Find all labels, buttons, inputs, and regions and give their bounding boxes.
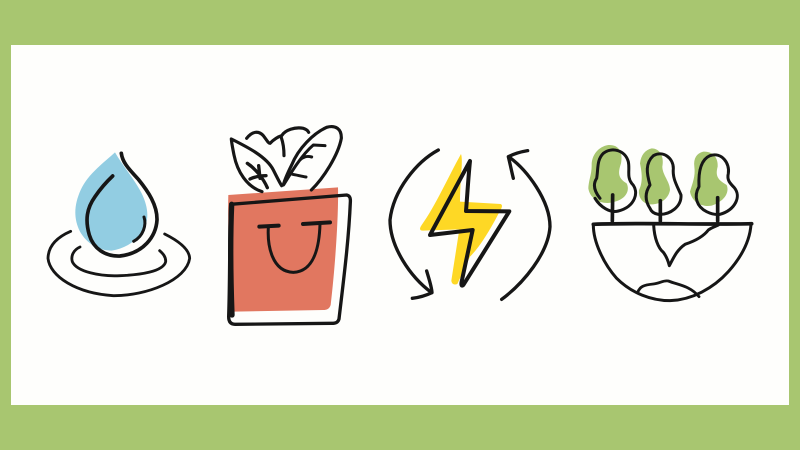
right arrow (502, 158, 550, 299)
icon: half globe with trees (588, 145, 752, 301)
left leaf (231, 139, 282, 192)
bag red fill (228, 187, 338, 312)
drop outline (48, 153, 190, 296)
tree 2 (646, 154, 681, 214)
bolt outline (430, 161, 509, 286)
bag outline (229, 195, 350, 324)
globe continent (654, 225, 718, 266)
globe bowl (593, 224, 751, 301)
ripples (48, 231, 190, 296)
icon: shopping bag with leaves (228, 127, 350, 324)
bolt yellow fill (420, 154, 502, 285)
globe rim (593, 218, 752, 230)
icon: lightning bolt with cycle arrows (390, 150, 550, 299)
tree 1 (594, 150, 636, 211)
bag handle (259, 226, 279, 227)
globe land (638, 281, 699, 297)
tree green fills (588, 145, 728, 206)
tree 3 (696, 155, 737, 214)
drop blue fill (75, 152, 147, 251)
icon: water drop with ripples (48, 152, 190, 296)
right leaf (283, 127, 341, 190)
left arrow (390, 150, 438, 293)
center leaf (247, 128, 309, 143)
white panel (11, 45, 789, 405)
